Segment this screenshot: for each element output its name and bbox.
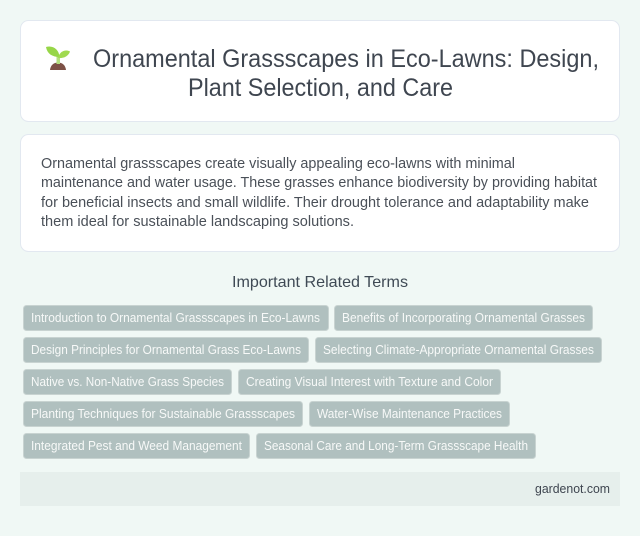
footer (20, 472, 620, 506)
tag: benefits: Benefits of Incorporating Ornamental Grasses (342, 311, 585, 325)
title (93, 45, 599, 102)
panel: related term tags (24, 306, 602, 458)
tag: introduction: Introduction to Ornamental Grassscapes in Eco-Lawns (31, 311, 320, 325)
tag: native species (24, 370, 232, 394)
tag: climate-appropriate (316, 338, 602, 362)
title: Plant Selection, and Care (188, 74, 453, 102)
text block: description: Ornamental grassscapes create visually appealing eco-lawns with minimal (41, 155, 515, 172)
text block: description (41, 155, 598, 230)
tag: pest management (24, 434, 250, 458)
tag: seasonal care (256, 434, 536, 458)
tag: planting techniques (24, 402, 302, 426)
title: Ornamental Grassscapes in Eco-Lawns: Design, (93, 45, 599, 73)
tag: water-wise: Water-Wise Maintenance Practices (317, 407, 502, 421)
tag: native species: Native vs. Non-Native Grass Species (31, 375, 224, 389)
tag: seasonal care: Seasonal Care and Long-Term Grassscape Health (264, 439, 528, 453)
panel: title card (20, 20, 620, 122)
footer: gardenot.com (535, 482, 610, 496)
icon: seedling (46, 47, 70, 70)
tag: design principles (24, 338, 308, 362)
tag: pest management: Integrated Pest and Weed Management (31, 439, 242, 453)
text block: description: them ideal for sustainable landscaping solutions. (41, 213, 354, 230)
text block: description: for beneficial insects and small wildlife. Their drought tolerance and adaptability make (41, 194, 589, 211)
tag: introduction (24, 306, 328, 330)
text block: description: maintenance and water usage. These grasses enhance biodiversity by providing habitat (41, 174, 598, 191)
heading: related terms: Important Related Terms (232, 274, 408, 291)
tag: water-wise (310, 402, 510, 426)
tag: visual interest (238, 370, 500, 394)
tag: planting techniques: Planting Techniques for Sustainable Grassscapes (31, 407, 295, 421)
tag: climate-appropriate: Selecting Climate-Appropriate Ornamental Grasses (323, 343, 594, 357)
tag: visual interest: Creating Visual Interest with Texture and Color (246, 375, 493, 389)
panel: description card (20, 134, 620, 252)
tag: benefits (334, 306, 592, 330)
tag: design principles: Design Principles for Ornamental Grass Eco-Lawns (31, 343, 301, 357)
